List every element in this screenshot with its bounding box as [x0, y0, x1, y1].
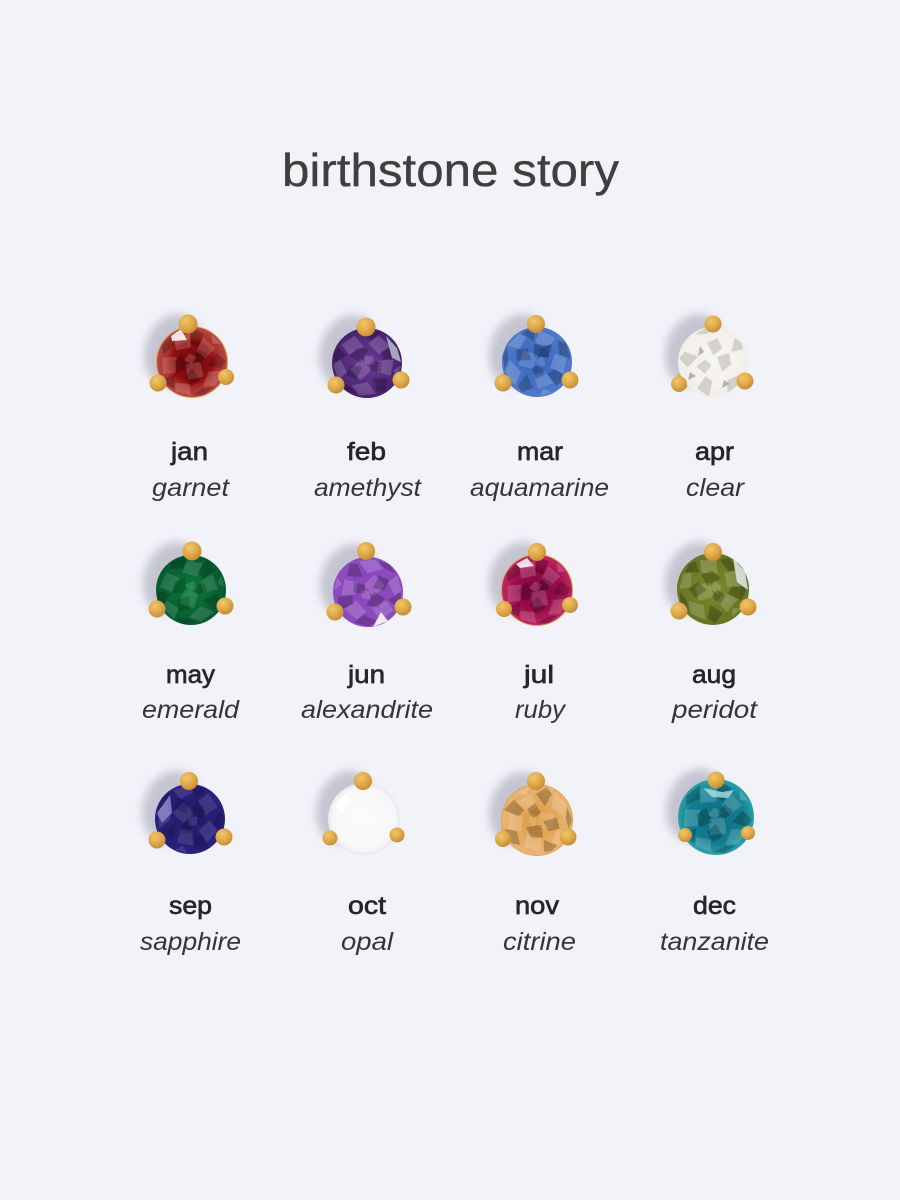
nov citrine cell: citrine — [503, 928, 576, 956]
sep sapphire cell: sep — [169, 892, 212, 920]
icon: emerald stud — [145, 542, 238, 636]
oct opal cell — [307, 763, 404, 956]
apr clear cell: apr — [695, 438, 734, 466]
icon: aquamarine stud — [491, 315, 584, 409]
jan garnet cell: jan — [170, 438, 208, 466]
nov citrine cell — [480, 764, 582, 956]
feb amethyst cell — [310, 307, 422, 502]
jan garnet cell: garnet — [152, 474, 230, 502]
dec tanzanite cell: dec — [693, 892, 736, 920]
icon: ruby stud — [496, 543, 578, 629]
mar aquamarine cell — [470, 306, 609, 502]
mar aquamarine cell: aquamarine — [470, 474, 609, 502]
apr clear cell: clear — [686, 474, 746, 502]
jun alexandrite cell — [301, 536, 433, 724]
oct opal cell: opal — [341, 928, 395, 956]
jan garnet cell — [135, 306, 234, 502]
icon: citrine stud — [491, 772, 582, 865]
sep sapphire cell — [133, 763, 241, 956]
icon: tanzanite stud — [672, 772, 760, 861]
mar aquamarine cell: mar — [517, 438, 563, 466]
feb amethyst cell: amethyst — [314, 474, 422, 502]
aug peridot cell: aug — [692, 661, 736, 689]
icon: garnet stud — [150, 314, 234, 401]
icon: alexandrite stud — [325, 542, 412, 635]
feb amethyst cell: feb — [347, 438, 386, 466]
nov citrine cell: nov — [515, 892, 560, 920]
jul ruby cell: ruby — [515, 696, 567, 724]
icon: opal stud — [322, 772, 404, 855]
jun alexandrite cell: jun — [347, 661, 385, 689]
title: birthstone story — [282, 144, 619, 196]
icon: peridot stud — [670, 543, 756, 627]
may emerald cell: emerald — [142, 696, 240, 724]
aug peridot cell — [656, 534, 758, 724]
oct opal cell: oct — [348, 892, 386, 920]
aug peridot cell: peridot — [671, 696, 758, 724]
jul ruby cell — [480, 534, 578, 724]
may emerald cell — [134, 534, 240, 724]
icon: amethyst stud — [325, 318, 410, 405]
icon: sapphire stud — [148, 772, 233, 862]
jun alexandrite cell: alexandrite — [301, 696, 433, 724]
sep sapphire cell: sapphire — [140, 928, 241, 956]
may emerald cell: may — [166, 661, 216, 689]
dec tanzanite cell — [657, 761, 769, 956]
jul ruby cell: jul — [523, 661, 554, 689]
apr clear cell — [656, 306, 755, 502]
dec tanzanite cell: tanzanite — [660, 928, 769, 956]
icon: clear stone stud — [670, 316, 755, 405]
